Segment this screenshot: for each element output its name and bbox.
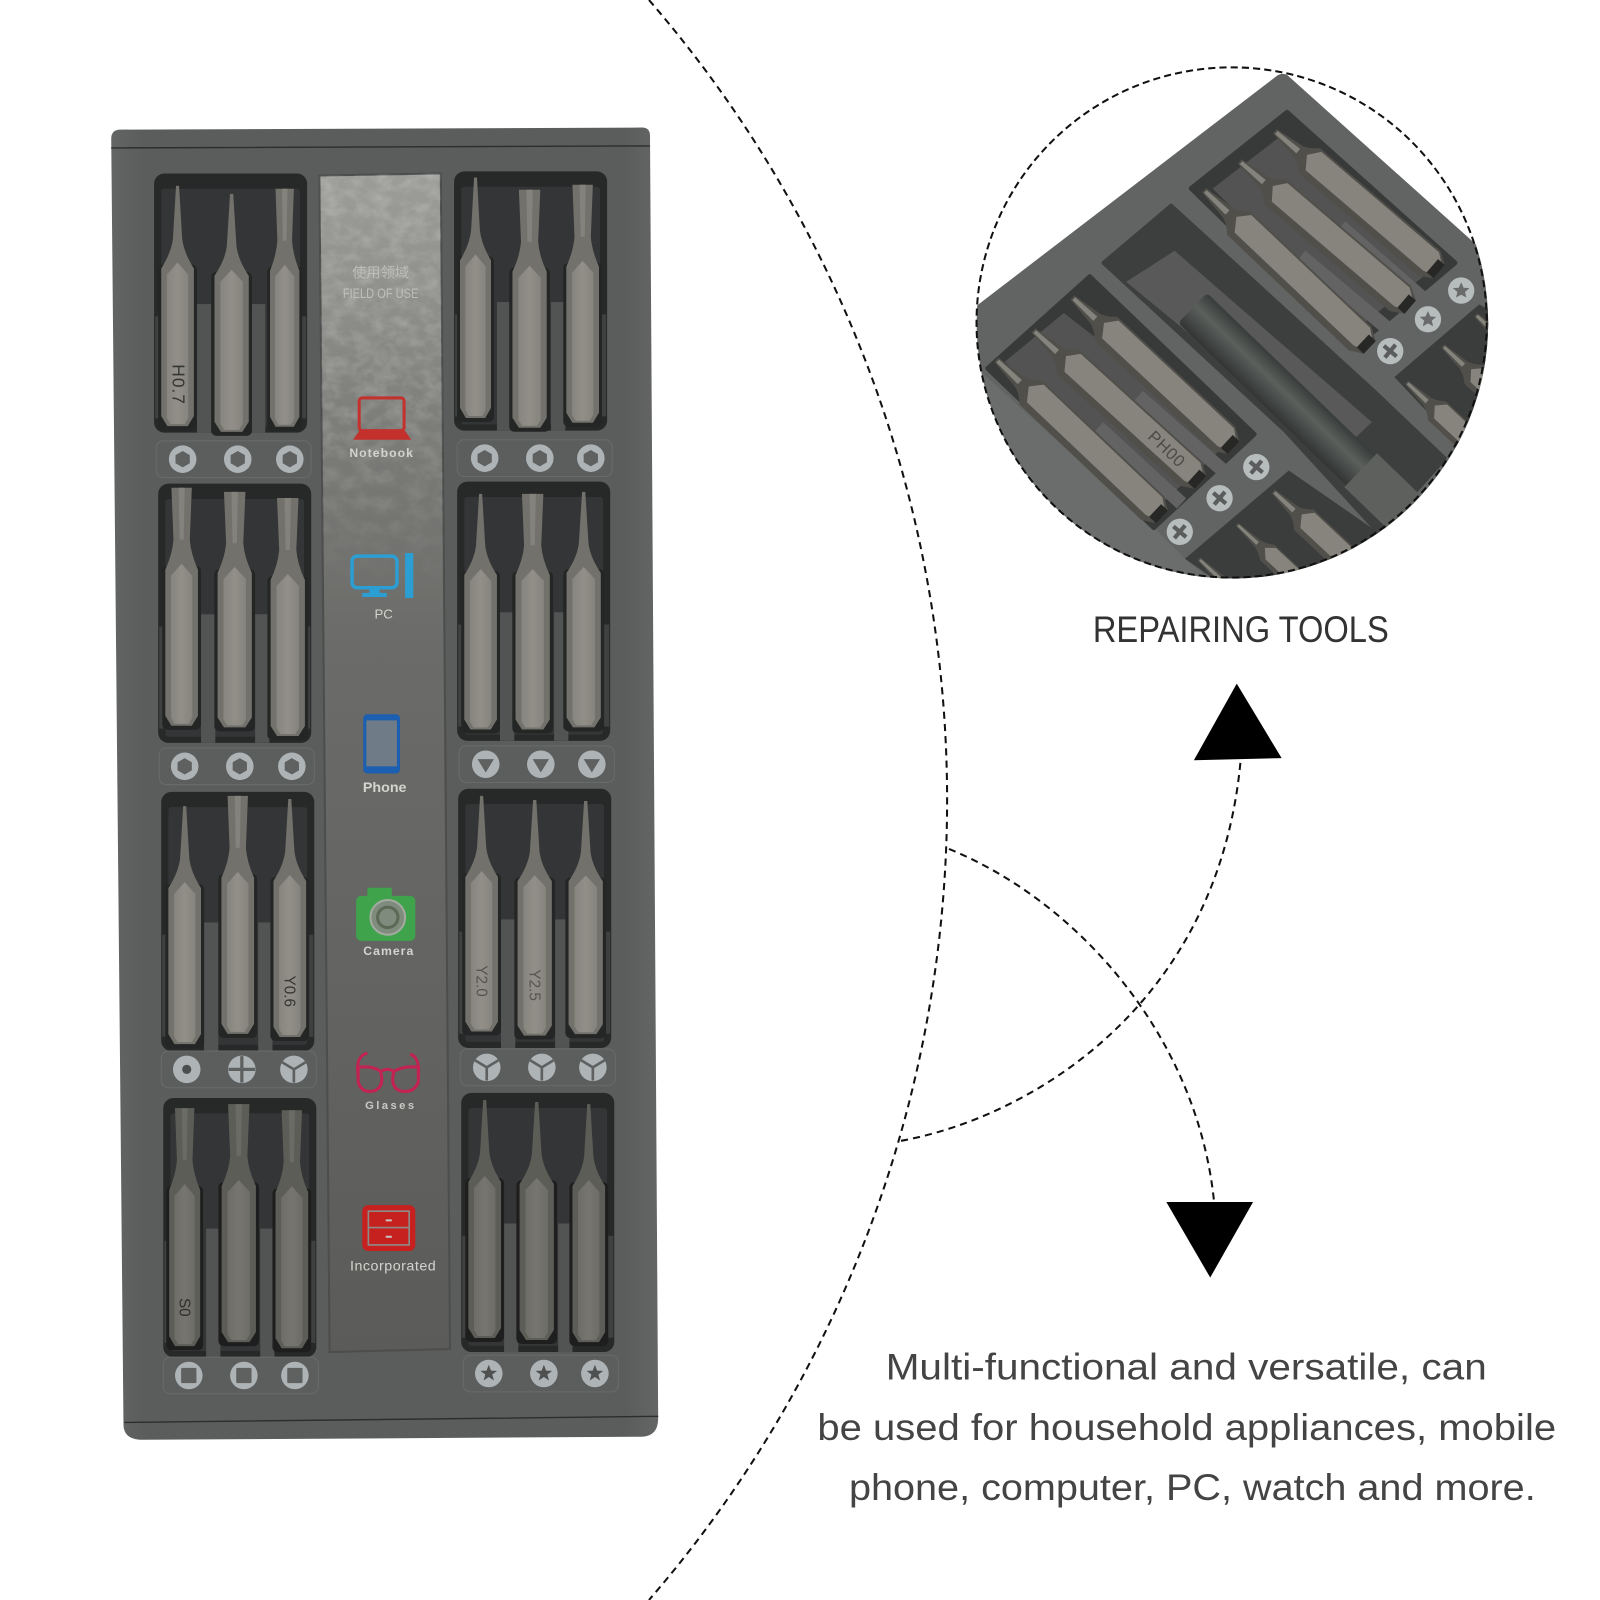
heading: field of use: FIELD OF USE (343, 286, 418, 302)
compartment: handle bay (1104, 206, 1445, 533)
compartment row 3 right (458, 789, 611, 1048)
cross markers (1166, 454, 1270, 545)
compartment row 1 left (154, 173, 307, 436)
compartment: left (988, 277, 1254, 528)
icon strip row 4 right: star (463, 1355, 618, 1392)
arrow: up to repairing tools (901, 684, 1282, 1141)
bits: lower compartment (1198, 490, 1354, 578)
compartment row 2 right (457, 482, 610, 741)
icon: camera (356, 888, 415, 941)
bits: left compartment (994, 296, 1240, 524)
dashed circle outline (977, 67, 1487, 578)
engraved label: Y0.6 (281, 976, 298, 1007)
icon strip row 2 right: triangle (459, 746, 614, 783)
icon strip row 1 right: hex (457, 440, 612, 477)
label: camera: Camera (363, 944, 414, 958)
icon strip row 3 left: mixed (161, 1051, 316, 1088)
description text: phone, computer, PC, watch and more. (849, 1467, 1536, 1508)
icon strip row 1 left: hex (156, 441, 311, 478)
compartment: right (1394, 304, 1488, 444)
description text: Multi-functional and versatile, can (886, 1347, 1487, 1388)
icon strip row 4 left: square (163, 1357, 318, 1394)
icon: pc (352, 553, 413, 598)
lower-left edge shade (982, 373, 1208, 578)
left compartment floor and risers (1005, 313, 1230, 510)
circular detail inset (976, 74, 1488, 578)
star markers (1372, 277, 1474, 370)
rotated tray body (960, 74, 1507, 597)
compartment row 3 left (161, 792, 314, 1051)
handle bay floor (1126, 251, 1372, 455)
icon: glasses (358, 1053, 419, 1091)
upper compartment floor and risers (1213, 137, 1434, 330)
engraved label: S0 (176, 1298, 193, 1317)
compartment: lower (1185, 471, 1379, 590)
description text (817, 1347, 1556, 1508)
label: glasses: Glases (365, 1100, 417, 1112)
icon: cabinet (362, 1205, 415, 1251)
large dashed arc divider (649, 0, 947, 1600)
icon: notebook (353, 398, 411, 440)
compartment: upper (1191, 112, 1455, 348)
description text: be used for household appliances, mobile (817, 1407, 1556, 1448)
compartment row 2 left (158, 484, 311, 743)
bits: upper compartment (1202, 129, 1444, 354)
icon: phone (363, 714, 400, 773)
label: pc: PC (374, 606, 393, 621)
tray case (111, 128, 658, 1440)
engraved label: Y2.5 (526, 969, 543, 1001)
compartment row 1 right (454, 171, 607, 432)
label: incorporated: Incorporated (350, 1258, 436, 1274)
icon strip row 2 left: hex (159, 748, 314, 785)
bits: right compartment (1405, 313, 1488, 446)
heading: repairing tools: REPAIRING TOOLS (1093, 609, 1389, 650)
engraved label: Y2.0 (473, 965, 490, 997)
engraved label: PH00 (1144, 427, 1189, 471)
label: notebook: Notebook (349, 446, 414, 460)
center label plate (318, 172, 451, 1353)
icon strip row 3 right: tri-wing (460, 1049, 615, 1086)
compartment row 4 right (461, 1093, 614, 1352)
label: phone: Phone (363, 780, 407, 796)
product photo: bit set tray (111, 128, 658, 1440)
arrow: down to description (949, 849, 1253, 1278)
heading: field of use (343, 265, 418, 302)
compartment row 4 left (163, 1098, 316, 1357)
heading: field of use: 使用领域 (352, 265, 409, 282)
socket handle (1176, 291, 1428, 536)
engraved label: H0.7 (168, 364, 188, 405)
